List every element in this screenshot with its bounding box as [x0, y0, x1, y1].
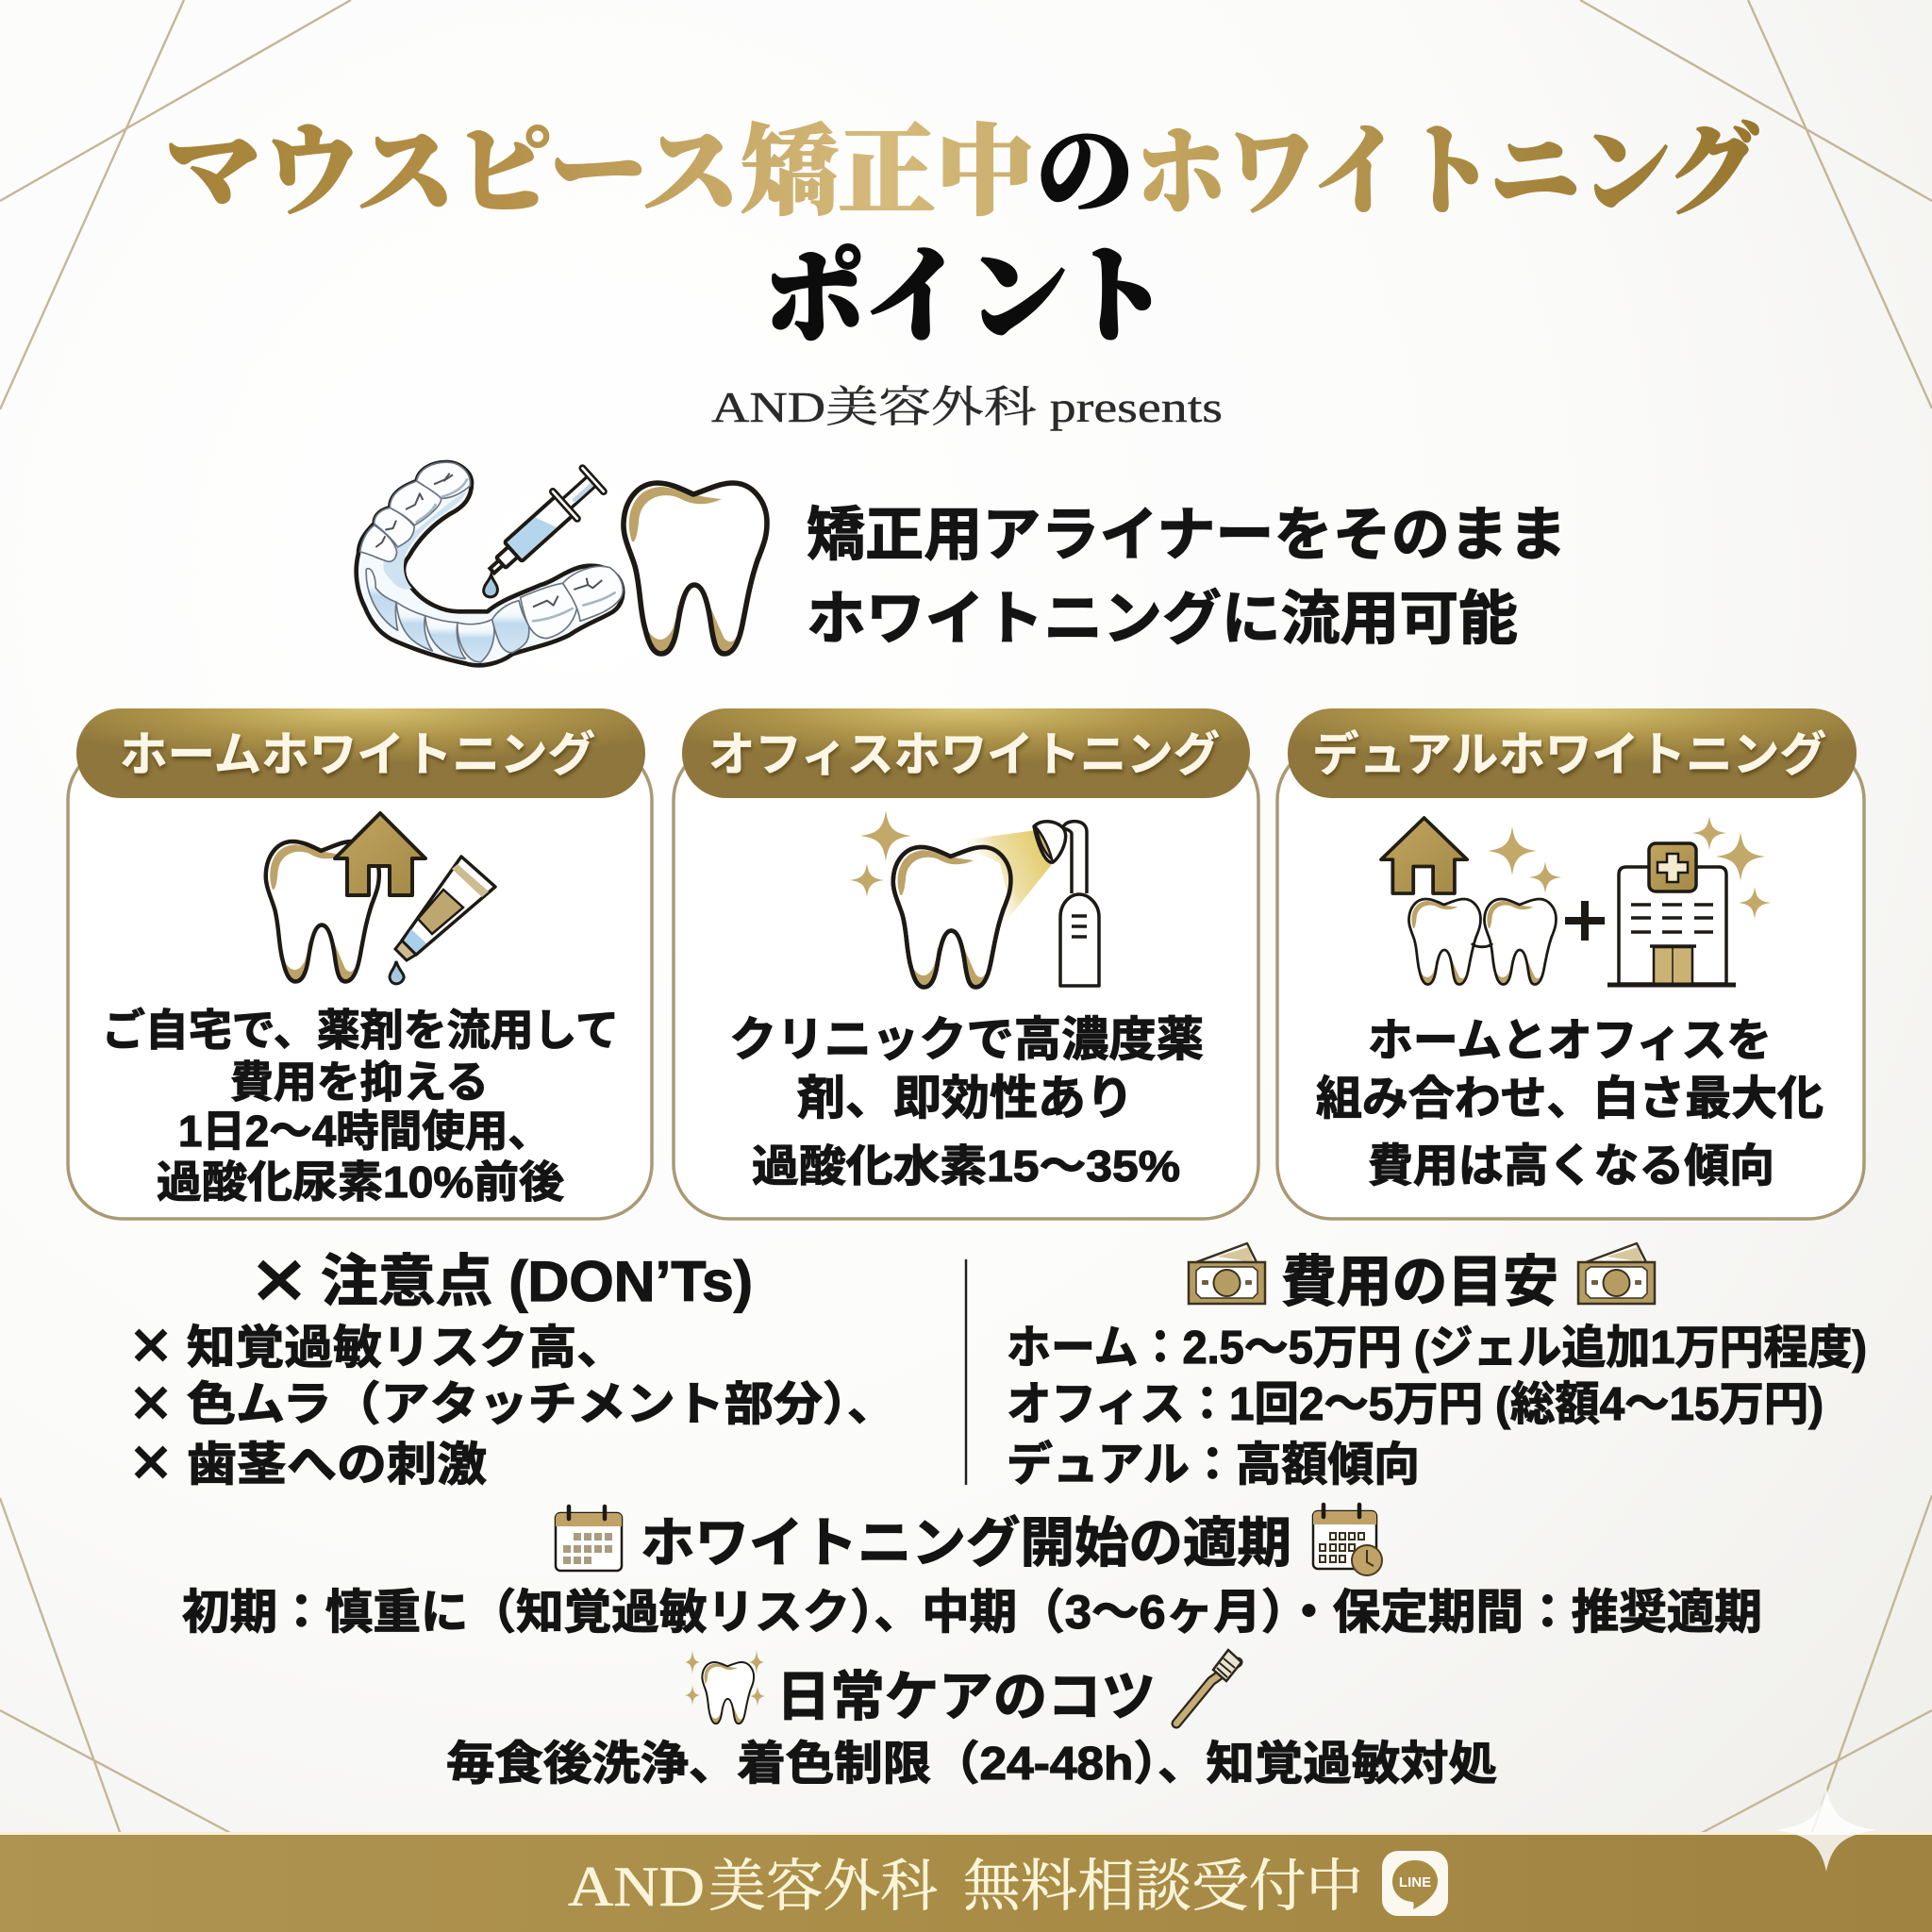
card text: [1316, 1016, 1824, 1191]
footer text: 無料相談受付中: [963, 1856, 1363, 1918]
icon: line: [1382, 1851, 1448, 1916]
key message: [807, 503, 1567, 652]
card text: 組み合わせ、白さ最大化: [1316, 1074, 1824, 1124]
title: マウスピース矯正中: [164, 119, 1034, 227]
title: ホワイトニング: [1136, 119, 1758, 227]
icon: large tooth: [624, 483, 767, 654]
panel: dual whitening: [1277, 708, 1864, 1219]
footer text: [568, 1856, 1363, 1918]
panel: office whitening: [674, 708, 1258, 1219]
card text: 過酸化尿素10%前後: [157, 1158, 564, 1207]
card text: 1日2〜4時間使用、: [178, 1107, 551, 1156]
icon: home tooth and gel: [266, 813, 495, 984]
icon: money right: [1578, 1243, 1655, 1304]
pill heading: オフィスホワイトニング: [708, 728, 1220, 781]
pill heading: [76, 708, 645, 798]
pill heading: [1288, 708, 1857, 798]
subtitle: AND美容外科 presents: [711, 383, 1223, 431]
icon: line: LINE: [1399, 1874, 1431, 1890]
icon: syringe: [480, 466, 606, 584]
list: don'ts: [137, 1323, 896, 1491]
card text: ご自宅で、薬剤を流用して: [102, 1006, 619, 1055]
icon: money left: [1189, 1243, 1265, 1304]
card text: ホームとオフィスを: [1368, 1016, 1772, 1066]
footer bar: [0, 1832, 1932, 1932]
card text: 費用を抑える: [230, 1058, 489, 1107]
title: [164, 119, 1758, 356]
card text: 過酸化水素15〜35%: [752, 1141, 1180, 1191]
section: don'ts: [137, 1250, 896, 1491]
list: costs: [1007, 1323, 1867, 1491]
list: don'ts: 歯茎への刺激: [187, 1440, 487, 1491]
footer text: AND: [568, 1856, 705, 1918]
card text: クリニックで高濃度薬: [729, 1013, 1204, 1066]
list: don'ts: 色ムラ（アタッチメント部分）、: [187, 1379, 896, 1430]
icon: calendar left: [556, 1507, 622, 1571]
icon: small tooth: [685, 1650, 765, 1724]
key message: ホワイトニングに流用可能: [807, 587, 1518, 652]
list: costs: オフィス：1回2〜5万円 (総額4〜15万円): [1007, 1379, 1824, 1430]
card text: 剤、即効性あり: [797, 1072, 1134, 1124]
section: timing: [182, 1505, 1762, 1639]
panel: home whitening: [68, 708, 652, 1219]
card text: 費用は高くなる傾向: [1368, 1141, 1774, 1191]
pill heading: デュアルホワイトニング: [1312, 728, 1826, 781]
heading: cost: 費用の目安: [1281, 1251, 1558, 1313]
icon: toothbrush: [1176, 1650, 1241, 1724]
list: costs: デュアル：高額傾向: [1007, 1440, 1420, 1491]
text: timing: 初期：慎重に（知覚過敏リスク）、中期（3〜6ヶ月）・保定期間：推奨適期: [182, 1586, 1762, 1639]
pill heading: [682, 708, 1250, 798]
heading: don'ts: 注意点 (DON’Ts): [321, 1250, 753, 1313]
footer text: 美容外科: [708, 1856, 938, 1918]
list: don'ts: 知覚過敏リスク高、: [187, 1323, 625, 1374]
text: care: 毎食後洗浄、着色制限（24-48h）、知覚過敏対処: [446, 1739, 1497, 1790]
icon: tooth with lamp: [850, 810, 1099, 987]
icon: drop: [484, 575, 497, 597]
icon: heading cross: [260, 1263, 298, 1297]
icon: home plus clinic: [1381, 816, 1771, 985]
icon: clear aligner: [357, 462, 623, 665]
pill heading: ホームホワイトニング: [120, 728, 595, 781]
icon: calendar with clock: [1313, 1505, 1382, 1575]
key message: 矯正用アライナーをそのまま: [807, 503, 1567, 568]
icon: corner sparkle: [1774, 1788, 1876, 1872]
heading: care: 日常ケアのコツ: [776, 1667, 1156, 1727]
card text: [729, 1013, 1204, 1191]
title: ポイント: [764, 241, 1168, 356]
section: daily care: [446, 1650, 1497, 1790]
card text: [102, 1006, 619, 1207]
title: の: [1036, 119, 1134, 227]
heading: timing: ホワイトニング開始の適期: [641, 1513, 1291, 1574]
list: costs: ホーム：2.5〜5万円 (ジェル追加1万円程度): [1007, 1323, 1867, 1374]
section: cost guide: [1007, 1243, 1867, 1491]
